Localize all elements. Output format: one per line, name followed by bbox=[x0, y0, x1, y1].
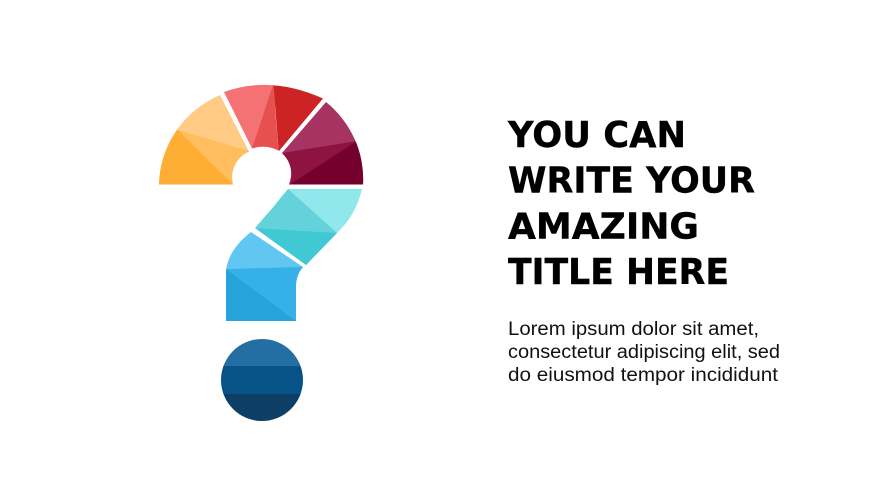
segment: maroon bbox=[282, 102, 364, 184]
body text: do eiusmod tempor incididunt bbox=[508, 365, 779, 386]
question mark graphic bbox=[150, 80, 370, 422]
body text: Lorem ipsum dolor sit amet, bbox=[508, 319, 759, 340]
segment: blue bbox=[225, 230, 305, 325]
body text: consectetur adipiscing elit, sed bbox=[508, 342, 780, 363]
title: AMAZING bbox=[508, 206, 699, 248]
segment: orange bbox=[159, 95, 249, 184]
title: TITLE HERE bbox=[508, 252, 729, 293]
title: YOU CAN bbox=[507, 115, 686, 156]
dot: blue circle bbox=[220, 338, 304, 422]
title: WRITE YOUR bbox=[508, 160, 755, 202]
segment: red bbox=[224, 84, 323, 151]
segment: cyan bbox=[255, 189, 362, 265]
title bbox=[507, 115, 755, 293]
body text bbox=[508, 319, 780, 386]
